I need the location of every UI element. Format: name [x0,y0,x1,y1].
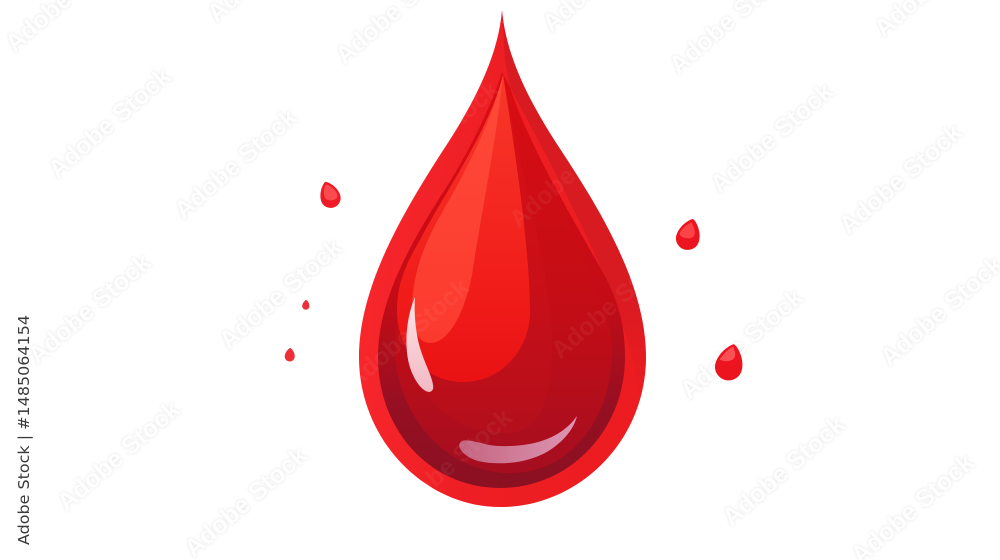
icon: main blood drop [359,10,646,507]
watermark pattern: Adobe Stock [214,233,348,355]
icon: droplet lower right [711,340,749,384]
vertical credit text: Adobe Stock | #1485064154 [15,315,33,545]
watermark pattern: Adobe Stock [705,77,839,199]
icon: droplet upper right [672,215,706,253]
highlight: bottom shine [459,416,577,463]
watermark pattern: Adobe Stock [179,441,313,560]
icon: droplet small [302,299,310,310]
watermark over drop [341,75,680,560]
watermark pattern: Adobe Stock [834,118,968,240]
watermark pattern: Adobe Stock [52,395,186,517]
watermark over drop: Adobe Stock [384,403,518,525]
watermark pattern: Adobe Stock [717,410,851,532]
watermark pattern: Adobe Stock [675,283,809,405]
icon: droplet lower left [284,347,296,362]
watermark over drop: Adobe Stock [371,75,505,197]
watermark over drop: Adobe Stock [504,112,638,234]
watermark over drop: Adobe Stock [341,273,475,395]
highlight: left shine [406,297,433,392]
icon: droplet upper left [317,179,342,210]
watermark over drop: Adobe Stock [546,243,680,365]
watermark pattern: Adobe Stock [23,248,157,370]
watermark pattern: Adobe Stock [169,103,303,225]
watermark pattern: Adobe Stock [43,62,177,184]
